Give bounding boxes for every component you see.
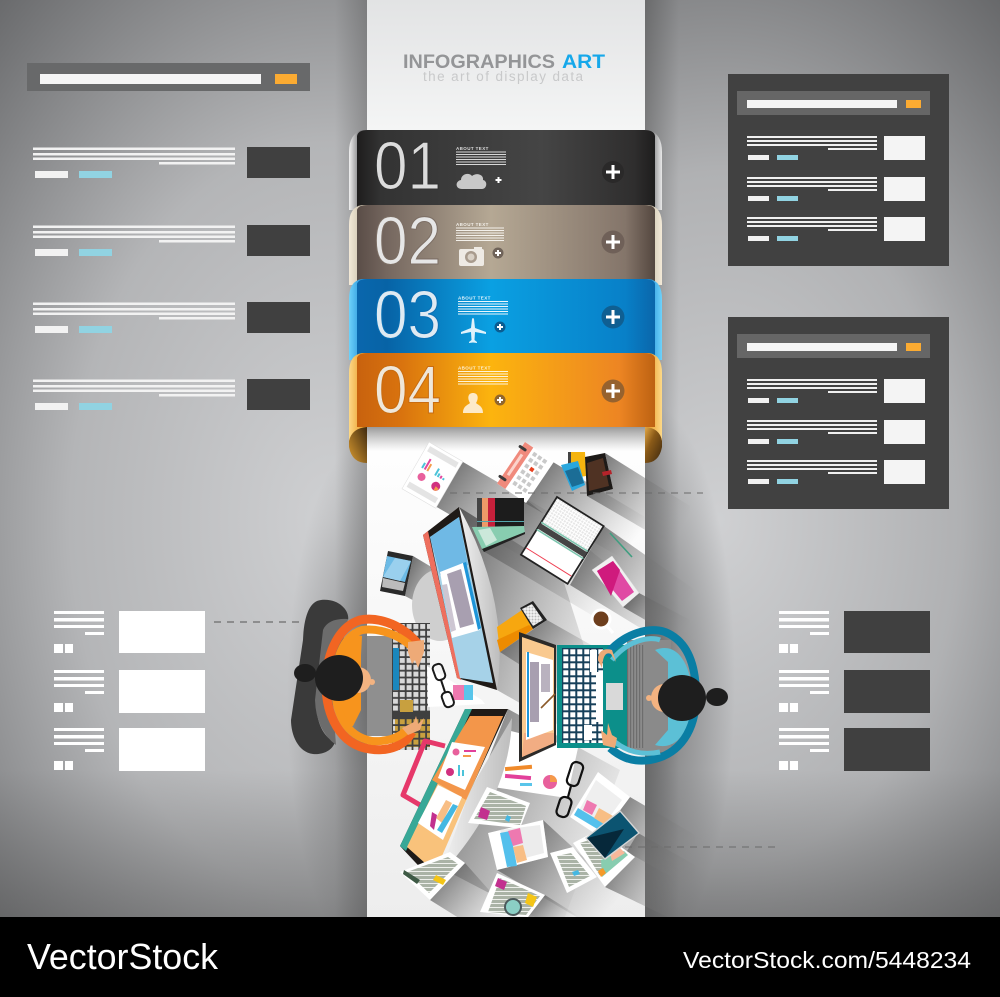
- panel: right dark card bottom: [728, 317, 949, 509]
- plus button: [602, 306, 624, 328]
- card row 3: [747, 460, 925, 484]
- hands: [598, 649, 617, 748]
- text block: [456, 222, 504, 241]
- ribbon curl: right: [645, 426, 662, 463]
- illustration: coffee cup: [590, 608, 613, 633]
- ribbon band 4: [349, 352, 662, 441]
- gray well inside left arms: [367, 636, 392, 736]
- icon: person: [463, 393, 483, 413]
- number 02: 02: [374, 203, 441, 279]
- illustration: smartphone: [380, 551, 413, 596]
- paper f: [570, 772, 630, 837]
- screen doc one: [438, 742, 485, 790]
- footer logo: VectorStock: [27, 936, 219, 977]
- text block: [458, 366, 508, 384]
- footer bar: [0, 917, 1000, 997]
- small plus: [494, 394, 506, 406]
- title block: [403, 52, 605, 84]
- box row 3: [54, 728, 205, 771]
- plus button: [602, 380, 624, 402]
- title: INFOGRAPHICS: [403, 52, 555, 73]
- hair: [315, 655, 363, 701]
- illustration: pencil: [610, 533, 632, 557]
- face: [345, 667, 371, 693]
- paper a: [400, 852, 465, 900]
- illustration: open notebook: [521, 497, 604, 584]
- small plus: [496, 177, 502, 183]
- text block: ABOUT TEXT: [456, 146, 489, 151]
- illustration: left chair: [291, 600, 348, 754]
- plus button: [602, 161, 624, 183]
- box row 1: [779, 611, 930, 653]
- title accent: ART: [562, 52, 605, 73]
- illustration: chart document: [402, 442, 463, 508]
- dashed connector: top: [450, 492, 703, 494]
- text block: ABOUT TEXT: [458, 296, 491, 300]
- ribbon band 1: [349, 128, 662, 210]
- ribbon curl: left: [349, 426, 367, 463]
- desk shadows: [367, 427, 672, 917]
- text block: [456, 146, 506, 165]
- card row 1: [747, 379, 925, 403]
- card row 2: [747, 177, 925, 201]
- text block: ABOUT TEXT: [456, 222, 489, 227]
- arms: [326, 619, 418, 750]
- dashed connector: bottom: [625, 846, 780, 848]
- ribbon band 2: [349, 203, 662, 285]
- box row 1: [54, 611, 205, 653]
- illustration: doc under laptop: [493, 730, 578, 798]
- list row 4: [33, 379, 310, 410]
- gray well inside right arms: [627, 640, 671, 752]
- hands: [402, 640, 424, 735]
- illustration: cards and wallet: [561, 452, 613, 496]
- icon: camera: [459, 247, 484, 266]
- handle: [403, 741, 445, 805]
- ribbon band 3: [349, 277, 662, 360]
- text block: [458, 296, 508, 314]
- illustration: scattered papers: [400, 772, 640, 917]
- central paper strip: [367, 0, 645, 917]
- list row 1: [33, 147, 310, 178]
- illustration: calendar: [495, 440, 554, 503]
- panel: left list rows: [33, 147, 310, 410]
- paper d: [550, 847, 597, 893]
- arms: [606, 630, 696, 761]
- panel: lower left white boxes: [54, 611, 205, 771]
- dashed connector: left: [214, 621, 304, 623]
- box row 3: [779, 728, 930, 771]
- card row 1: [747, 136, 925, 160]
- box row 2: [54, 670, 205, 713]
- plus button: [602, 230, 624, 254]
- illustration: orange phone: [497, 601, 547, 652]
- paper c: [488, 820, 548, 870]
- number 01: 01: [374, 128, 441, 204]
- text block: ABOUT TEXT: [458, 366, 491, 370]
- tagline: the art of display data: [423, 69, 583, 84]
- illustration: closed notebook: [472, 498, 525, 552]
- trackpad: [606, 683, 623, 710]
- torso: [332, 635, 362, 726]
- illustration: lower monitor: [400, 709, 512, 878]
- icon: cloud: [457, 174, 486, 189]
- panel: right dark card top: [728, 74, 949, 266]
- hair: [658, 675, 706, 721]
- card row 2: [747, 420, 925, 444]
- number 03: 03: [374, 277, 441, 353]
- keyboard: [562, 648, 603, 743]
- dark tablet: [585, 810, 640, 860]
- illustration: top monitor: [412, 507, 500, 690]
- illustration: right person: [598, 630, 728, 761]
- illustration: doc and glasses near keyboard: [427, 663, 485, 708]
- box row 2: [779, 670, 930, 713]
- face: [651, 684, 677, 712]
- small plus: [492, 248, 504, 258]
- illustration: glasses: [555, 761, 584, 818]
- card row 3: [747, 217, 925, 241]
- small plus: [494, 322, 506, 332]
- illustration: left person: [294, 619, 424, 750]
- panel: left top header bar: [27, 63, 310, 91]
- screen document: [440, 562, 481, 638]
- number 04: 04: [374, 352, 441, 428]
- torso: [655, 648, 692, 746]
- list row 2: [33, 225, 310, 256]
- list row 3: [33, 302, 310, 333]
- illustration: pink tablet: [592, 556, 639, 607]
- paper e: [573, 830, 635, 887]
- glasses: [432, 663, 455, 708]
- footer url: VectorStock.com/5448234: [683, 947, 971, 973]
- paper g: [480, 873, 545, 917]
- icon: airplane: [461, 318, 486, 343]
- illustration: laptop: [519, 632, 645, 762]
- paper b: [468, 787, 530, 828]
- screen: [519, 632, 556, 762]
- illustration: left keyboard: [392, 623, 430, 750]
- panel: lower right dark boxes: [779, 611, 930, 771]
- screen doc two: [418, 785, 462, 840]
